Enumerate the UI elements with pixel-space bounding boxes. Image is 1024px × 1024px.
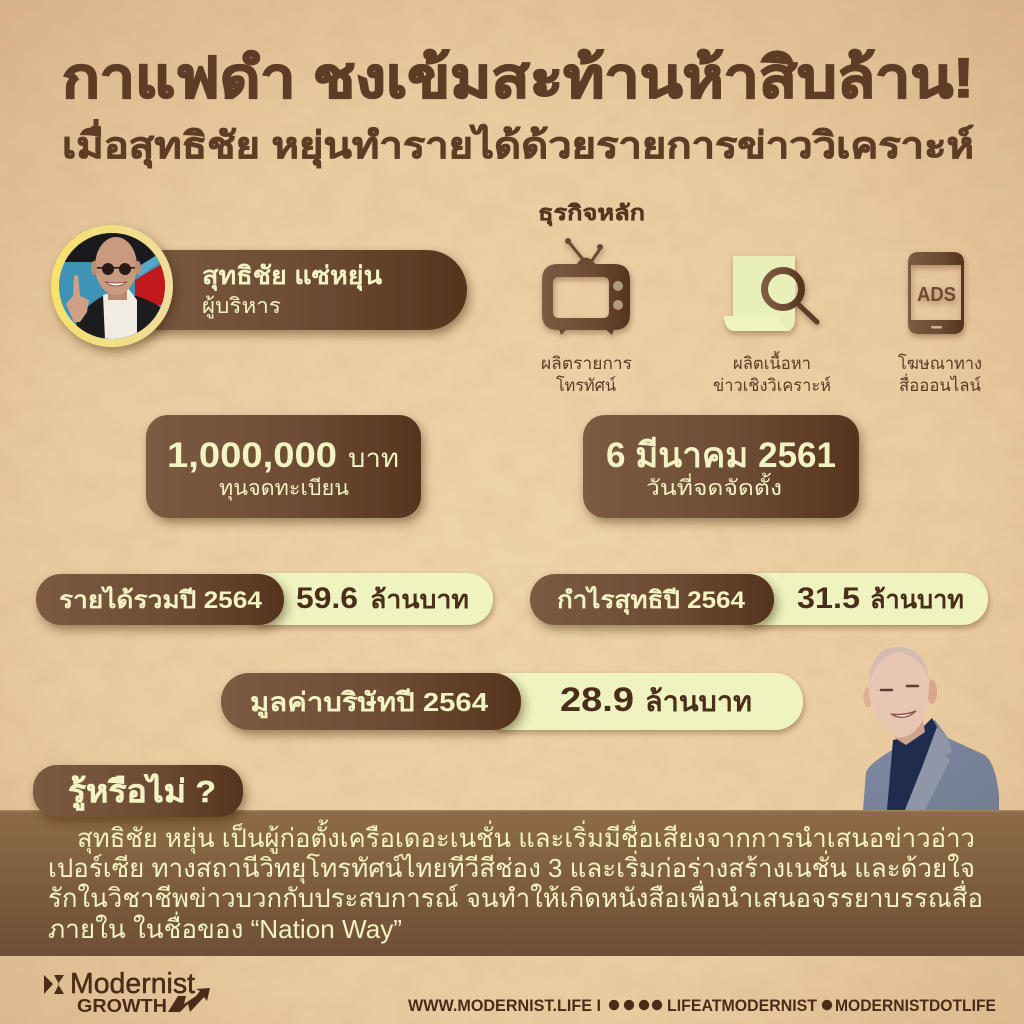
panel: executive profile [51,225,467,347]
did you know body text: รักในวิชาชีพข่าวบวกกับประสบการณ์ จนทำให้เกิดหนังสือเพื่อนำเสนอจรรยาบรรณสื่อ [48,880,983,913]
did you know body text: สุทธิชัย หยุ่น เป็นผู้ก่อตั้งเครือเดอะเนชั่น และเริ่มมีชื่อเสียงจากการนำเสนอข่าวอ่าว [77,819,975,854]
heading: main business: ธุรกิจหลัก [538,202,645,227]
stat: net profit 2564: ล้านบาท [870,586,964,614]
title: กาแฟดำ ชงเข้มสะท้านห้าสิบล้าน! [62,46,974,109]
footer: website and social handles: LIFEATMODERNIST [667,996,818,1015]
panel: registered capital [146,415,421,518]
portrait: circular photo [51,225,173,347]
subtitle: เมื่อสุทธิชัย หยุ่นทำรายได้ด้วยรายการข่าววิเคราะห์ [62,119,974,169]
label: online media advertising [898,353,982,395]
panel: did you know band [0,765,1024,956]
footer: website and social handles: MODERNISTDOTLIFE [835,996,996,1015]
name pill: สุทธิชัย แซ่หยุ่น [202,262,382,292]
icon: television [542,238,630,335]
logo: Modernist Growth: GROWTH [77,996,167,1016]
panel: registered capital: 1,000,000 [167,436,337,475]
label: analytical news content: ผลิตเนื้อหา [733,351,811,373]
name pill: ผู้บริหาร [202,295,281,319]
icon: document with magnifier [724,256,817,331]
panel: founding date [583,415,859,518]
label: television production: ผลิตรายการ [541,354,632,373]
logo: Modernist Growth [44,968,210,1016]
stat: company value 2564 [221,673,803,730]
label: television production [541,354,632,395]
did you know pill [33,765,243,817]
stat: total revenue 2564: รายได้รวมปี 2564 [59,585,263,614]
name pill [100,250,467,330]
stat: net profit 2564 [530,573,988,625]
label: online media advertising: โฆษณาทาง [898,353,982,373]
stat: net profit 2564: 31.5 [797,582,860,615]
panel: founding date: 6 มีนาคม 2561 [606,436,836,475]
portrait: cut-out photo of man in grey jacket [863,647,999,810]
label: analytical news content [713,351,831,395]
panel: founding date: วันที่จดจัดตั้ง [646,473,782,500]
stat: company value 2564: มูลค่าบริษัทปี 2564 [250,687,489,719]
icon: phone with ads [908,252,964,334]
label: analytical news content: ข่าวเชิงวิเคราะห์ [713,376,831,395]
logo: Modernist Growth: Modernist [70,968,195,1000]
label: online media advertising: สื่อออนไลน์ [899,373,981,395]
stat: total revenue 2564: 59.6 [296,582,358,615]
label: television production: โทรทัศน์ [556,375,616,395]
footer: website and social handles: WWW.MODERNIST.LIFE I [408,996,601,1015]
stat: total revenue 2564 [36,573,493,625]
icon: phone with ads: ADS [917,284,956,306]
did you know pill: รู้หรือไม่ ? [68,773,216,811]
footer: website and social handles [408,996,996,1015]
stat: net profit 2564: กำไรสุทธิปี 2564 [557,585,746,616]
did you know body text [48,819,983,944]
stat: company value 2564: ล้านบาท [645,686,752,717]
did you know body text: ภายใน ในชื่อของ “Nation Way” [48,911,402,944]
stat: company value 2564: 28.9 [560,681,634,719]
stat: total revenue 2564: ล้านบาท [370,586,469,614]
panel: registered capital: ทุนจดทะเบียน [219,477,349,501]
did you know body text: เปอร์เซีย ทางสถานีวิทยุโทรทัศน์ไทยทีวีสีช่อง 3 และเริ่มก่อร่างสร้างเนชั่น และด้วยใจ [48,850,975,884]
panel: registered capital: บาท [348,443,399,473]
